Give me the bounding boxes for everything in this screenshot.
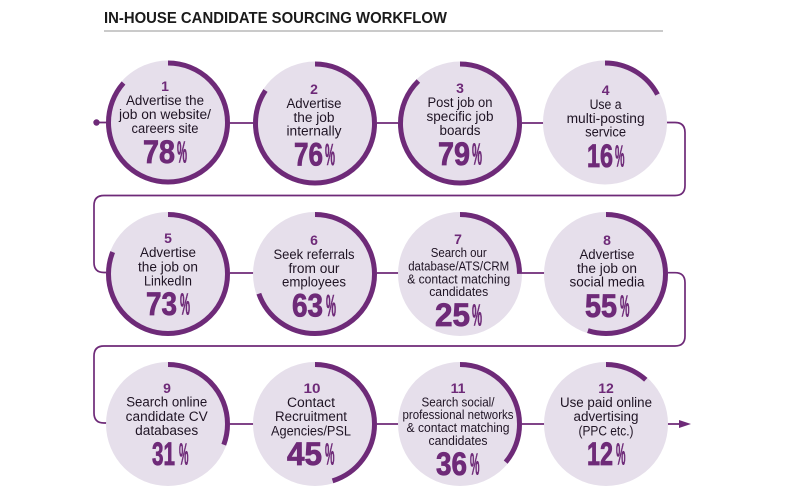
step 7: Search our database/ATS/CRM and contact matching candidates, 25%: candidates: [429, 285, 488, 299]
step 2: Advertise the job internally, 76%: 2: [310, 81, 318, 97]
step 3: Post job on specific job boards, 79%: [398, 62, 522, 186]
step 1: Advertise the job on website/careers site, 78%: job on website/: [118, 107, 211, 122]
step 7: Search our database/ATS/CRM and contact matching candidates, 25%: & contact matching: [407, 272, 510, 286]
step 8: Advertise the job on social media, 55%: Advertise: [580, 247, 634, 262]
step 8: Advertise the job on social media, 55%: 55: [585, 288, 617, 324]
step 9: Search online candidate CV databases, 31%: Search online: [126, 395, 207, 410]
step 7: Search our database/ATS/CRM and contact matching candidates, 25%: 25: [435, 297, 470, 333]
step 9: Search online candidate CV databases, 31%: 9: [163, 380, 171, 396]
step 5: Advertise the job on LinkedIn, 73%: [106, 212, 230, 336]
step 1: Advertise the job on website/careers site, 78%: Advertise the: [126, 93, 204, 108]
step 1: Advertise the job on website/careers site, 78%: 78: [143, 134, 175, 170]
step 4: Use a multi-posting service, 16%: 16: [587, 138, 613, 174]
step 6: Seek referrals from our employees, 63%: employees: [282, 275, 346, 290]
step 7: Search our database/ATS/CRM and contact matching candidates, 25%: database/ATS/CRM: [408, 260, 509, 274]
step 9: Search online candidate CV databases, 31%: databases: [135, 423, 198, 438]
step 4: Use a multi-posting service, 16%: service: [585, 125, 626, 140]
step 5: Advertise the job on LinkedIn, 73%: LinkedIn: [144, 274, 192, 289]
step 10: Contact Recruitment Agencies/PSL, 45%: 10: [304, 380, 321, 396]
step 5: Advertise the job on LinkedIn, 73%: 73: [146, 286, 177, 322]
step 3: Post job on specific job boards, 79%: 3: [456, 80, 464, 96]
step 10: Contact Recruitment Agencies/PSL, 45%: 45: [287, 436, 322, 472]
step 3: Post job on specific job boards, 79%: %: [472, 136, 482, 172]
step 1: Advertise the job on website/careers site, 78%: 1: [161, 78, 169, 94]
step 1: Advertise the job on website/careers site, 78%: %: [177, 134, 187, 170]
step 7: Search our database/ATS/CRM and contact matching candidates, 25%: [398, 212, 522, 336]
step 4: Use a multi-posting service, 16%: Use a: [590, 97, 622, 112]
step 6: Seek referrals from our employees, 63%: %: [326, 288, 336, 323]
step 1: Advertise the job on website/careers site, 78%: [106, 60, 230, 184]
step 3: Post job on specific job boards, 79%: Post job on: [428, 95, 492, 110]
step 6: Seek referrals from our employees, 63%: Seek referrals: [274, 247, 355, 262]
step 9: Search online candidate CV databases, 31%: 31: [152, 436, 175, 472]
title: IN-HOUSE CANDIDATE SOURCING WORKFLOW: [104, 10, 447, 27]
step 6: Seek referrals from our employees, 63%: from our: [288, 261, 340, 276]
step 8: Advertise the job on social media, 55%: 8: [603, 232, 611, 248]
step 12: Use paid online advertising (PPC etc.), 12%: 12: [587, 436, 613, 472]
step 2: Advertise the job internally, 76%: [253, 62, 377, 186]
step 5: Advertise the job on LinkedIn, 73%: 5: [164, 230, 172, 246]
step 5: Advertise the job on LinkedIn, 73%: Advertise: [140, 245, 196, 260]
step 3: Post job on specific job boards, 79%: 79: [438, 136, 470, 172]
step 10: Contact Recruitment Agencies/PSL, 45%: [253, 362, 377, 486]
step 10: Contact Recruitment Agencies/PSL, 45%: Contact: [287, 395, 335, 410]
step 10: Contact Recruitment Agencies/PSL, 45%: Recruitment: [275, 409, 347, 424]
step 5: Advertise the job on LinkedIn, 73%: %: [180, 286, 190, 322]
step 3: Post job on specific job boards, 79%: boards: [440, 123, 481, 138]
step 12: Use paid online advertising (PPC etc.), 12%: (PPC etc.): [578, 424, 634, 439]
step 12: Use paid online advertising (PPC etc.), 12%: %: [616, 436, 626, 472]
step 9: Search online candidate CV databases, 31%: %: [179, 436, 188, 472]
step 9: Search online candidate CV databases, 31%: candidate CV: [126, 409, 208, 424]
step 10: Contact Recruitment Agencies/PSL, 45%: Agencies/PSL: [271, 424, 351, 439]
step 3: Post job on specific job boards, 79%: specific job: [426, 109, 494, 124]
step 11: Search social/professional networks and contact matching candidates, 36%: %: [470, 446, 480, 482]
step 10: Contact Recruitment Agencies/PSL, 45%: %: [325, 436, 334, 472]
step 11: Search social/professional networks and contact matching candidates, 36%: & contact matching: [406, 421, 510, 435]
step 8: Advertise the job on social media, 55%: [544, 212, 668, 336]
step 12: Use paid online advertising (PPC etc.), 12%: [544, 362, 668, 486]
step 2: Advertise the job internally, 76%: internally: [286, 124, 342, 139]
step 4: Use a multi-posting service, 16%: [543, 60, 667, 184]
step 11: Search social/professional networks and contact matching candidates, 36%: professional networks: [402, 408, 514, 422]
step 7: Search our database/ATS/CRM and contact matching candidates, 25%: 7: [454, 231, 462, 247]
step 7: Search our database/ATS/CRM and contact matching candidates, 25%: %: [472, 298, 482, 332]
step 4: Use a multi-posting service, 16%: %: [615, 138, 624, 174]
step 5: Advertise the job on LinkedIn, 73%: the job on: [138, 260, 198, 275]
step 8: Advertise the job on social media, 55%: social media: [570, 275, 645, 290]
step 4: Use a multi-posting service, 16%: multi-posting: [567, 111, 645, 126]
step 4: Use a multi-posting service, 16%: 4: [602, 82, 610, 98]
step 1: Advertise the job on website/careers site, 78%: careers site: [132, 121, 198, 136]
step 11: Search social/professional networks and contact matching candidates, 36%: Search social/: [422, 396, 495, 410]
step 11: Search social/professional networks and contact matching candidates, 36%: 36: [436, 446, 467, 482]
step 6: Seek referrals from our employees, 63%: 63: [292, 288, 323, 324]
arrow head: [679, 420, 691, 428]
step 8: Advertise the job on social media, 55%: the job on: [577, 261, 637, 276]
step 11: Search social/professional networks and contact matching candidates, 36%: 11: [451, 380, 466, 396]
step 7: Search our database/ATS/CRM and contact matching candidates, 25%: Search our: [431, 246, 487, 260]
step 2: Advertise the job internally, 76%: the job: [294, 110, 334, 125]
step 6: Seek referrals from our employees, 63%: 6: [310, 232, 318, 248]
step 2: Advertise the job internally, 76%: 76: [294, 136, 323, 172]
step 9: Search online candidate CV databases, 31%: [106, 362, 230, 486]
step 12: Use paid online advertising (PPC etc.), 12%: 12: [598, 380, 614, 396]
step 6: Seek referrals from our employees, 63%: [253, 212, 377, 336]
step 11: Search social/professional networks and contact matching candidates, 36%: candidates: [428, 434, 488, 448]
step 8: Advertise the job on social media, 55%: %: [620, 288, 630, 324]
workflow connector line: [93, 119, 685, 424]
step 2: Advertise the job internally, 76%: Advertise: [286, 96, 342, 111]
step 12: Use paid online advertising (PPC etc.), 12%: Use paid online: [560, 395, 652, 410]
step 2: Advertise the job internally, 76%: %: [325, 137, 335, 172]
step 11: Search social/professional networks and contact matching candidates, 36%: [398, 362, 522, 486]
step 12: Use paid online advertising (PPC etc.), 12%: advertising: [574, 409, 638, 424]
